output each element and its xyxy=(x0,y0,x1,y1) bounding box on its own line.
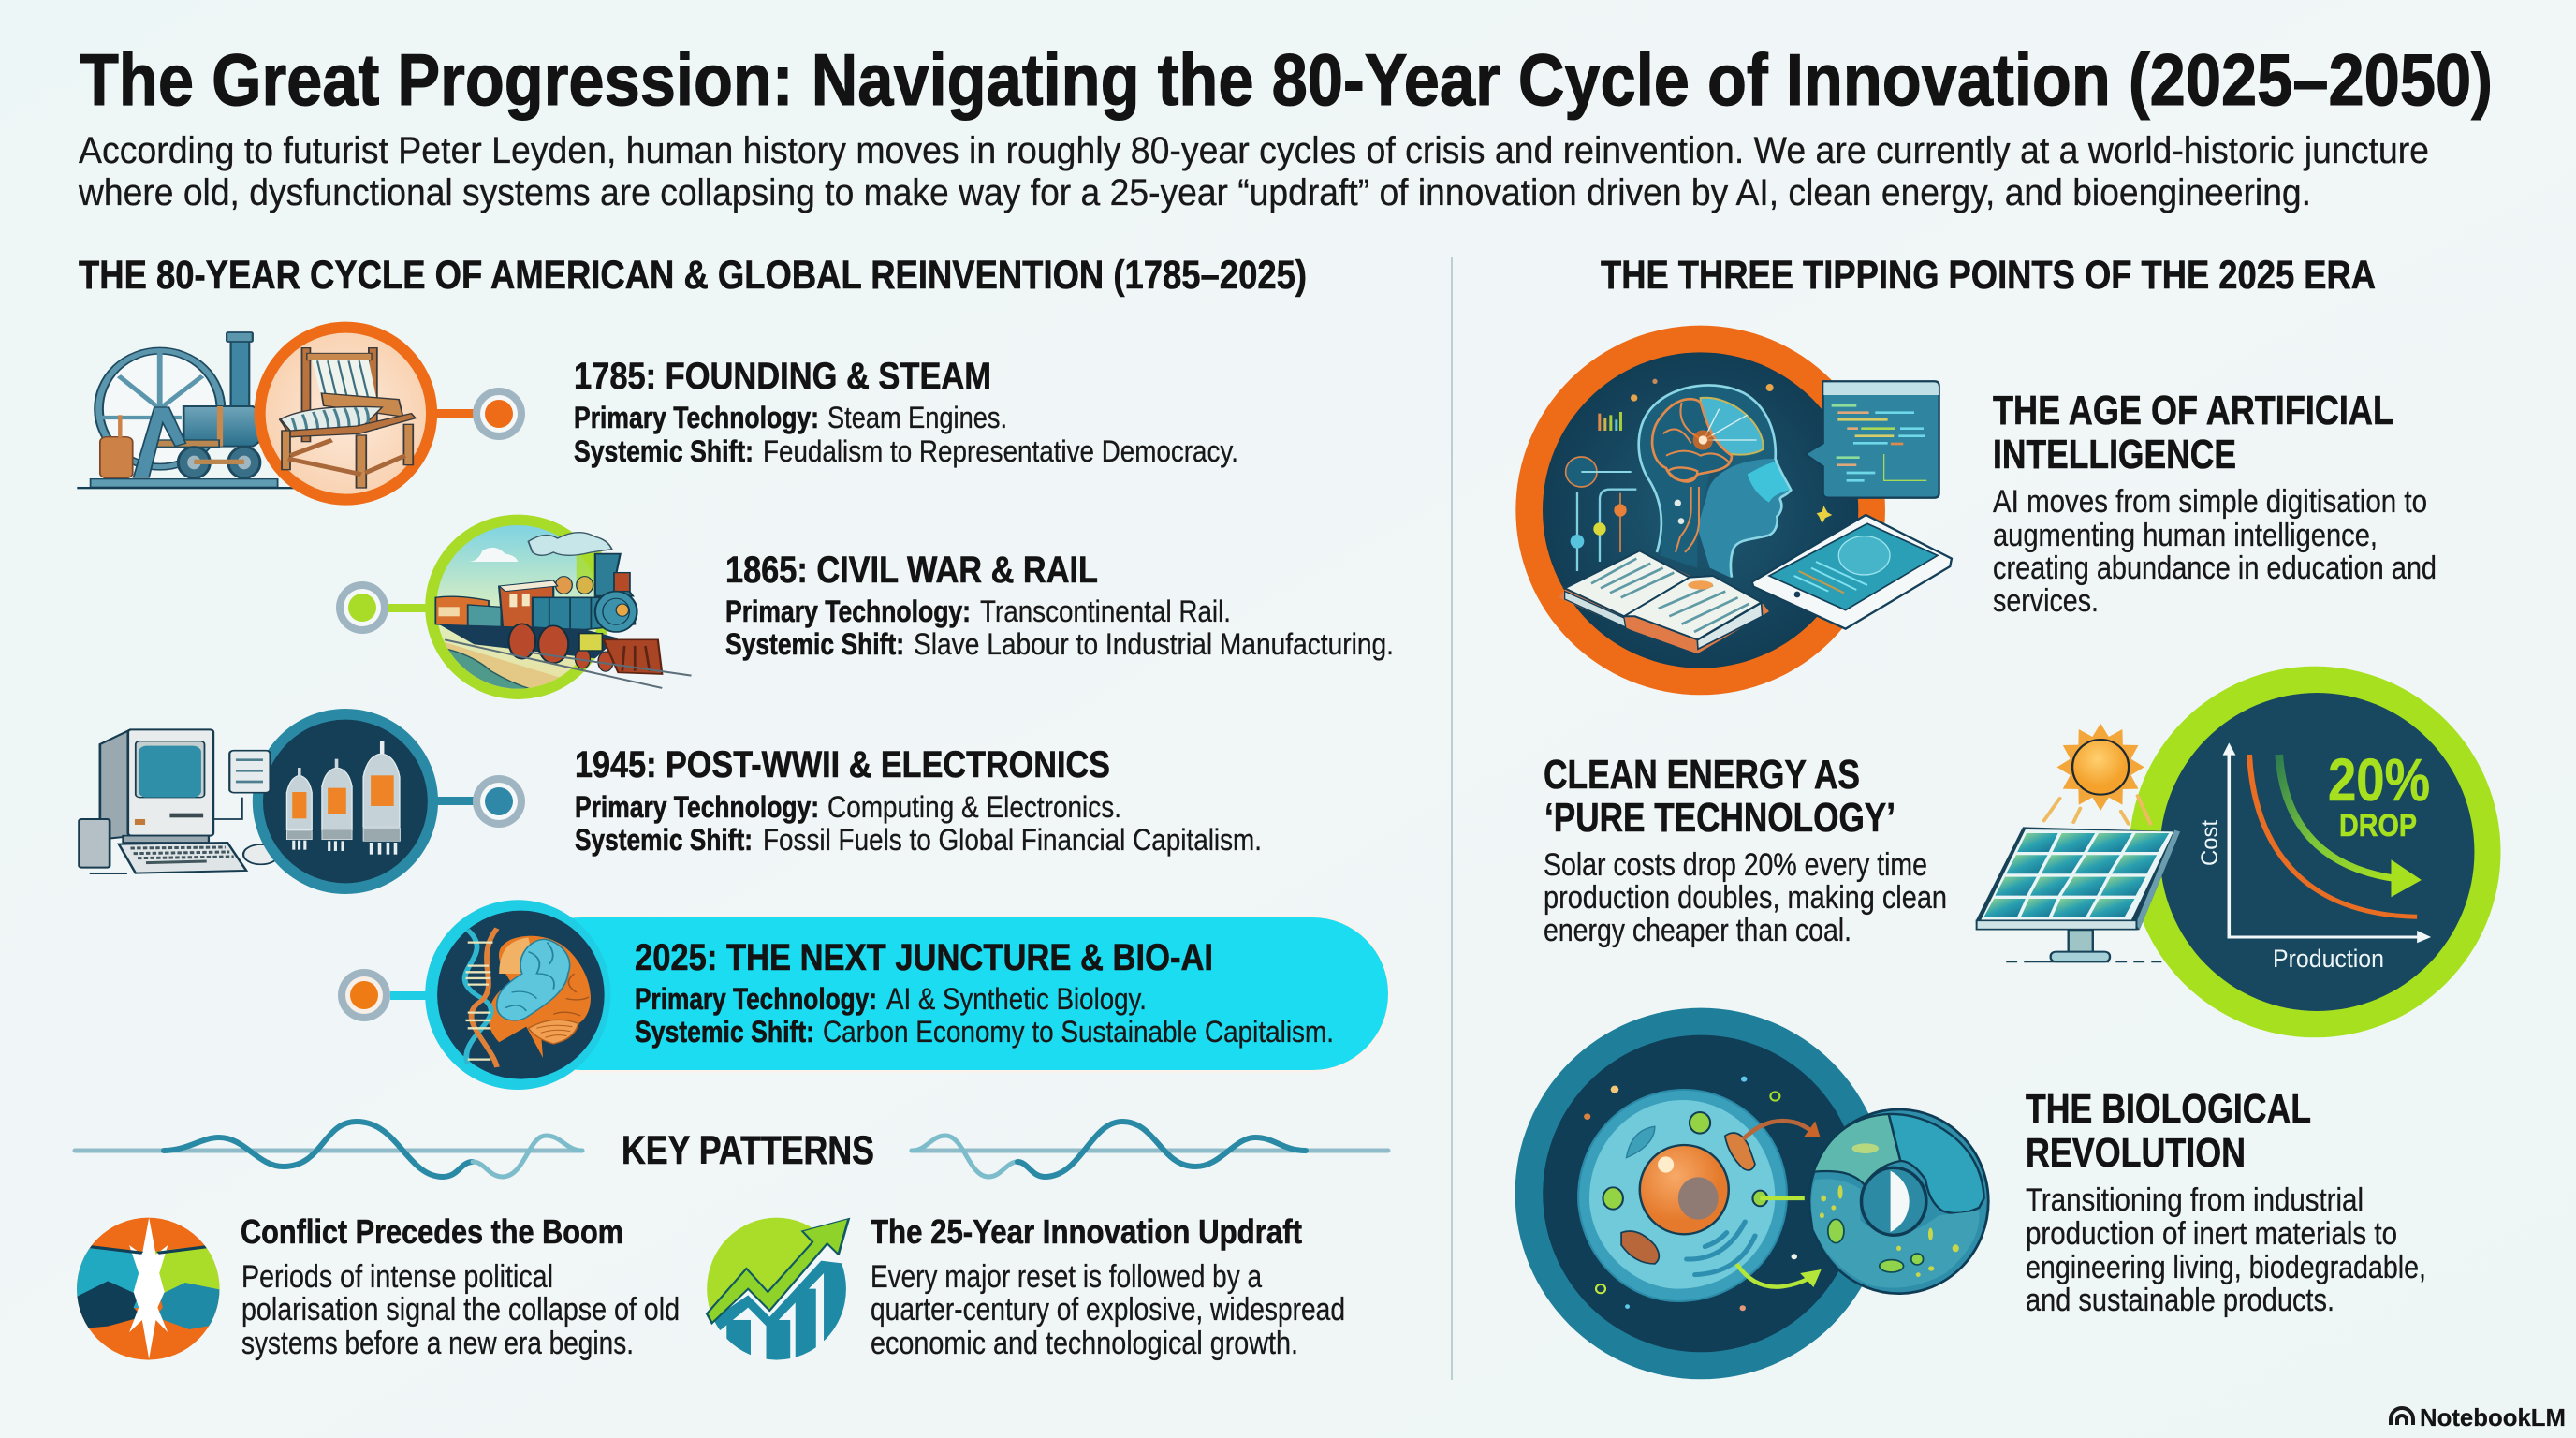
pattern: conflict precedes the boom: Periods of intense political xyxy=(242,1259,553,1295)
chart label: drop: DROP xyxy=(2339,808,2417,844)
panel: biological revolution xyxy=(1515,1008,2426,1379)
connector and node xyxy=(437,388,525,440)
biological revolution text: Transitioning from industrial xyxy=(2026,1182,2364,1218)
pattern: 25-year innovation updraft: The 25-Year Innovation Updraft xyxy=(871,1212,1302,1251)
1785 text: Feudalism to Representative Democracy. xyxy=(763,434,1238,468)
2025 text: Systemic Shift: xyxy=(635,1015,814,1049)
2025 text xyxy=(635,937,1334,1049)
icon: living cell and biomaterial ring xyxy=(1515,1008,1988,1379)
pattern: conflict precedes the boom: systems before a new era begins. xyxy=(242,1326,634,1361)
AI text xyxy=(1993,388,2437,619)
chart: cost vs production curve xyxy=(2130,667,2501,1037)
pattern: 25-year innovation updraft: economic and technological growth. xyxy=(871,1326,1298,1361)
chart label: production axis: Production xyxy=(2273,945,2384,973)
1865 text: Transcontinental Rail. xyxy=(980,594,1231,628)
clean energy text: production doubles, making clean xyxy=(1544,880,1947,916)
AI text: services. xyxy=(1993,583,2099,619)
icon: conflict faces xyxy=(73,1217,224,1360)
heading: key patterns: KEY PATTERNS xyxy=(622,1128,874,1173)
intro text xyxy=(78,130,2429,213)
AI text: INTELLIGENCE xyxy=(1993,432,2236,477)
panel: 2025 next juncture highlighted xyxy=(338,900,1388,1090)
biological revolution text: and sustainable products. xyxy=(2026,1283,2334,1318)
left section heading: THE 80-YEAR CYCLE OF AMERICAN & GLOBAL REINVENTION (1785–2025) xyxy=(79,253,1307,298)
panel: 1945 post-WWII and electronics xyxy=(80,709,1262,894)
wave decoration left xyxy=(75,1122,582,1177)
icon: AI head, book and tablet xyxy=(1515,326,1952,695)
1785 text: Primary Technology: xyxy=(574,401,819,434)
1945 text: 1945: POST-WWII & ELECTRONICS xyxy=(575,744,1110,785)
panel: clean energy xyxy=(1544,667,2501,1037)
1945 text: Fossil Fuels to Global Financial Capitalism. xyxy=(763,823,1262,857)
pattern: 25-year innovation updraft: Every major reset is followed by a xyxy=(871,1259,1262,1295)
biological revolution text: THE BIOLOGICAL xyxy=(2026,1086,2311,1132)
1865 text: Systemic Shift: xyxy=(725,627,904,661)
icon: vacuum tubes in teal circle xyxy=(229,709,438,894)
1865 text: Primary Technology: xyxy=(725,594,971,628)
biological revolution text xyxy=(2026,1086,2426,1318)
1865 text xyxy=(725,550,1394,661)
2025 text: AI & Synthetic Biology. xyxy=(886,982,1147,1016)
AI text: AI moves from simple digitisation to xyxy=(1993,484,2427,520)
panel: 1865 civil war and rail xyxy=(336,515,1394,699)
chart label: cost axis: Cost xyxy=(2197,820,2223,866)
1945 text: Primary Technology: xyxy=(575,790,819,824)
1785 text: Steam Engines. xyxy=(827,401,1007,434)
1945 text: Computing & Electronics. xyxy=(827,790,1121,824)
biological revolution text: REVOLUTION xyxy=(2026,1130,2246,1176)
pattern: conflict precedes the boom xyxy=(241,1212,680,1361)
icon: growth arrow xyxy=(701,1217,856,1364)
chart label: 20%: 20% xyxy=(2328,746,2430,814)
pattern: 25-year innovation updraft: quarter-century of explosive, widespread xyxy=(871,1292,1345,1328)
AI text: THE AGE OF ARTIFICIAL xyxy=(1993,388,2393,433)
panel: 1785 founding and steam xyxy=(77,322,1238,506)
icon: locomotive in green circle xyxy=(425,515,692,699)
1865 text: 1865: CIVIL WAR & RAIL xyxy=(725,550,1098,591)
connector and node xyxy=(437,775,525,828)
panel: key patterns xyxy=(73,1122,1388,1364)
clean energy text: Solar costs drop 20% every time xyxy=(1544,847,1927,883)
pattern: 25-year innovation updraft xyxy=(871,1212,1345,1361)
1945 text: Systemic Shift: xyxy=(575,823,753,857)
clean energy text: CLEAN ENERGY AS xyxy=(1544,752,1860,798)
AI text: creating abundance in education and xyxy=(1993,550,2437,586)
panel: age of artificial intelligence xyxy=(1515,326,2437,695)
pattern: conflict precedes the boom: polarisation signal the collapse of old xyxy=(242,1292,680,1328)
wave decoration right xyxy=(912,1122,1388,1177)
icon: steam engine xyxy=(77,332,294,489)
1945 text xyxy=(575,744,1262,857)
icon: solar panel and sun xyxy=(1976,724,2180,961)
connector and node xyxy=(338,969,428,1021)
AI text: augmenting human intelligence, xyxy=(1993,518,2378,553)
1785 text: 1785: FOUNDING & STEAM xyxy=(574,356,991,397)
1865 text: Slave Labour to Industrial Manufacturing. xyxy=(914,627,1394,661)
2025 text: Primary Technology: xyxy=(635,982,877,1016)
icon: DNA and brain in cyan circle xyxy=(425,900,610,1090)
connector and node xyxy=(336,581,427,634)
intro text: According to futurist Peter Leyden, human history moves in roughly 80-year cycles of crisis and reinvention. We are currently at a world-historic juncture xyxy=(79,130,2429,171)
intro text: where old, dysfunctional systems are collapsing to make way for a 25-year “updraft” of innovation driven by AI, clean energy, and bioengineering. xyxy=(78,172,2311,213)
pattern: conflict precedes the boom: Conflict Precedes the Boom xyxy=(241,1212,623,1251)
2025 text: 2025: THE NEXT JUNCTURE & BIO-AI xyxy=(635,937,1213,978)
clean energy text: ‘PURE TECHNOLOGY’ xyxy=(1544,795,1895,841)
icon: loom in orange circle xyxy=(255,322,437,506)
highlight pill xyxy=(505,917,1388,1070)
clean energy text xyxy=(1544,752,1947,948)
logo: NotebookLM: NotebookLM xyxy=(2420,1403,2566,1431)
biological revolution text: engineering living, biodegradable, xyxy=(2026,1250,2426,1285)
clean energy text: energy cheaper than coal. xyxy=(1544,913,1852,948)
icon: retro computer xyxy=(80,729,278,874)
biological revolution text: production of inert materials to xyxy=(2026,1216,2397,1252)
2025 text: Carbon Economy to Sustainable Capitalism. xyxy=(823,1015,1334,1049)
1785 text: Systemic Shift: xyxy=(574,434,754,468)
1785 text xyxy=(574,356,1238,468)
right section heading: THE THREE TIPPING POINTS OF THE 2025 ERA xyxy=(1601,253,2376,298)
